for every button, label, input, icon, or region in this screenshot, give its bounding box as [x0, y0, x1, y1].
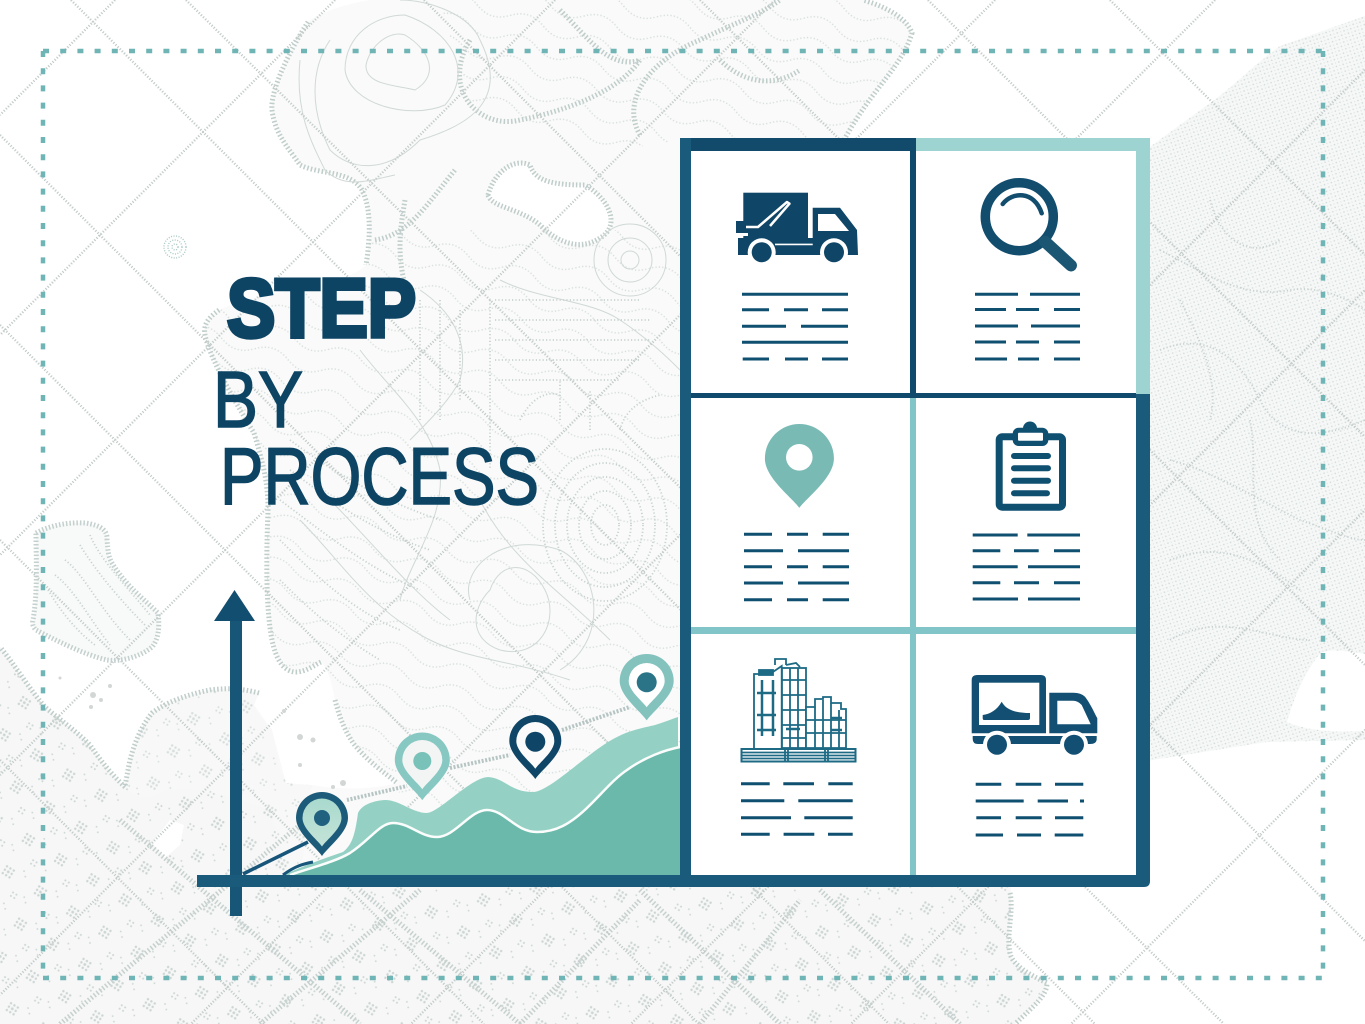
text lines — [741, 784, 853, 834]
icon: magnifying glass — [985, 183, 1071, 266]
title — [213, 262, 539, 522]
panel: warehouse buildings — [741, 659, 856, 834]
map: southern road bands — [60, 800, 960, 1024]
title: STEP: STEP — [227, 262, 416, 354]
map: coastline stipple — [0, 0, 1047, 1024]
grid: light inner lines — [691, 398, 1136, 875]
cell backgrounds — [691, 151, 1136, 875]
panel: delivery truck — [736, 193, 858, 359]
map: dotted contours — [48, 200, 1365, 660]
map: small lake — [152, 820, 184, 858]
icon: buildings — [742, 659, 856, 762]
chart: navy connector — [243, 842, 308, 874]
title: PROCESS: PROCESS — [220, 432, 539, 522]
panel: checklist — [973, 422, 1080, 599]
text lines — [973, 535, 1080, 599]
map: small compass mark — [164, 236, 186, 258]
panel: search — [975, 183, 1080, 359]
chart: dark area — [290, 747, 680, 876]
map: central contour texture — [205, 230, 690, 880]
text lines — [742, 294, 848, 359]
text lines — [744, 534, 849, 600]
grid: dark frame — [197, 138, 1150, 887]
map: eastern land mass — [1140, 16, 1365, 762]
panel: location — [744, 424, 849, 600]
chart: navy base curve — [283, 862, 313, 875]
icon: box truck — [972, 675, 1097, 759]
map: small dots in bay — [58, 676, 346, 789]
map: eastern bay — [1287, 650, 1365, 731]
map: main land mass — [0, 0, 1047, 1024]
pin 1 — [296, 792, 348, 856]
vertical axis arrow — [214, 590, 255, 916]
route dotted line — [347, 707, 630, 800]
map: contour lines — [299, 0, 680, 680]
panel: cargo truck — [972, 675, 1097, 835]
pin 2 — [395, 732, 450, 800]
area chart with pins — [243, 654, 680, 876]
chart: light area — [283, 717, 678, 875]
title: BY: BY — [213, 355, 303, 444]
icon: clipboard — [999, 422, 1062, 507]
grid: dark dividers — [691, 151, 1136, 398]
grid: top right light border — [916, 138, 1150, 394]
grid: dark top bar — [691, 138, 916, 151]
icon: tow truck — [736, 193, 858, 266]
text lines — [975, 294, 1080, 359]
pin 3 — [509, 715, 561, 779]
text lines — [976, 784, 1084, 835]
map: southern textured terrain — [0, 647, 1047, 1024]
map: northern contour texture — [440, 0, 912, 150]
pin 4 — [620, 654, 674, 720]
map: western peninsula terrain — [125, 690, 312, 880]
chart: white ridge line — [290, 747, 680, 875]
panel grid — [197, 138, 1150, 887]
map: interior lake — [488, 163, 611, 244]
icon: location pin — [765, 424, 834, 508]
map: western island — [33, 523, 159, 660]
